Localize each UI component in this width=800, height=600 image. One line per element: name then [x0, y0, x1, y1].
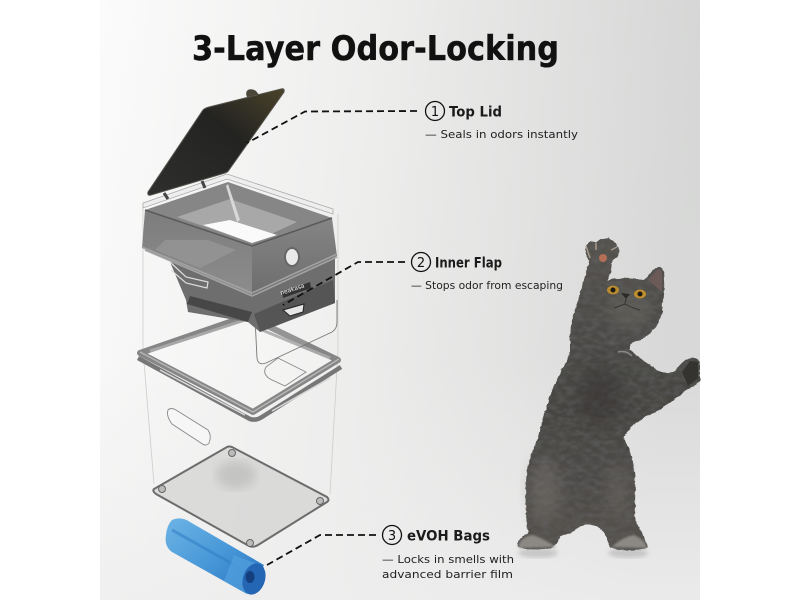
inner flap housing: neakasa: [279, 282, 306, 297]
callout 1: top lid: — Seals in odors instantly: [425, 128, 579, 141]
cat body: [518, 238, 700, 550]
callout 1: top lid: Top Lid: [449, 104, 502, 120]
callout 1: top lid: 1: [431, 105, 439, 120]
leader line 1: [247, 111, 417, 143]
title: 3-Layer Odor-Locking: [192, 29, 559, 69]
callout 3: eVOH bags: — Locks in smells with: [382, 553, 514, 566]
inner flap housing: [170, 258, 337, 364]
callout 2: inner flap: 2: [417, 256, 425, 271]
base plate: [153, 446, 328, 547]
top lid: [148, 89, 284, 199]
cat fur shading: [531, 290, 652, 522]
side handle slot: [168, 408, 210, 445]
upper box: [142, 174, 337, 296]
cat illustration: [518, 238, 700, 558]
callout 1: top lid: [425, 102, 579, 141]
background panel: [100, 0, 700, 600]
callout 3: eVOH bags: eVOH Bags: [407, 528, 490, 544]
exploded litter bin illustration: [135, 89, 343, 598]
callout 3: eVOH bags: 3: [388, 529, 396, 544]
callout 3: eVOH bags: [382, 526, 514, 581]
cat face and eyes: [607, 270, 662, 356]
blue eVOH bag roll: [166, 518, 269, 598]
leader line 3: [267, 535, 376, 565]
callout 2: inner flap: Inner Flap: [435, 256, 502, 272]
cat paws: [518, 243, 698, 548]
callout 2: inner flap: [411, 252, 563, 292]
callout 3: eVOH bags: advanced barrier film: [382, 568, 513, 581]
callout 2: inner flap: — Stops odor from escaping: [411, 279, 563, 292]
middle ring: [135, 314, 343, 420]
transparent bin walls: [143, 205, 338, 494]
leader line 2: [283, 262, 405, 305]
